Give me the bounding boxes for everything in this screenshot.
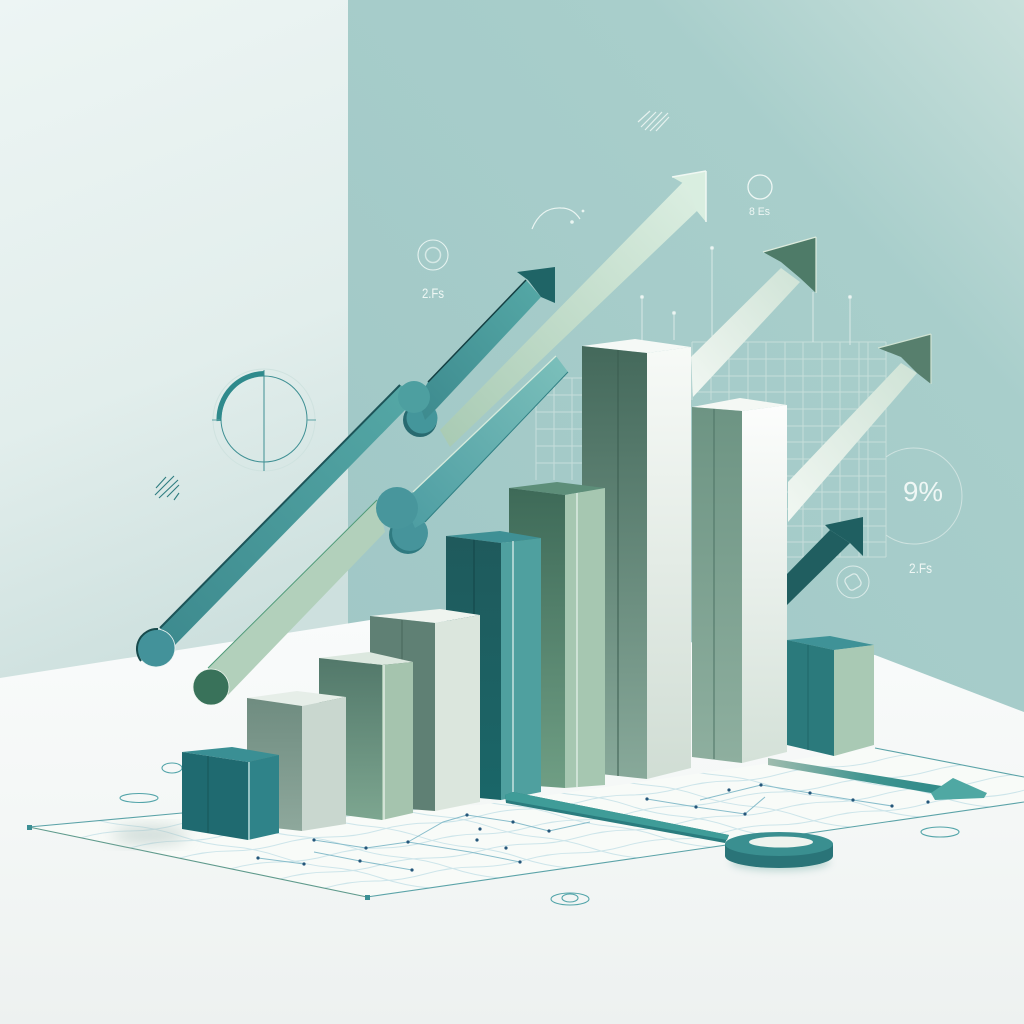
- icon: ring and label top right: 8 Es: [749, 206, 770, 218]
- icon: hatch top: [638, 111, 669, 131]
- arrow: lower teal: [389, 356, 568, 554]
- bar 4: [370, 609, 480, 811]
- arrow: dark teal small: [786, 517, 863, 605]
- icon: percent circle: [886, 448, 962, 576]
- chart: floor grid: [27, 748, 1024, 900]
- bar 7: [582, 339, 691, 779]
- icon: ring and label top right: [748, 175, 772, 218]
- shadow: under bars: [112, 827, 188, 843]
- bar 5: [446, 531, 541, 800]
- panel: right wall: [348, 0, 1024, 730]
- chart grid: pin lines: [640, 246, 852, 350]
- icon: target ring with label: 2.Fs: [422, 285, 444, 301]
- icon: percent circle: 9%: [903, 476, 943, 507]
- panel: left wall: [0, 0, 348, 700]
- arrow: floor arrow right: [768, 758, 987, 800]
- bar 3: [319, 652, 413, 820]
- icon: magnifier: [505, 792, 833, 871]
- icon: left dial: [212, 369, 316, 471]
- icon: small badge: [837, 566, 869, 598]
- icon: left hatch: [155, 476, 179, 500]
- arrow: light green long: [440, 171, 706, 447]
- bar 9: [787, 636, 874, 756]
- icon: percent circle: 2.Fs: [909, 560, 932, 576]
- bar 1: [182, 747, 279, 840]
- bar 2: [247, 691, 346, 831]
- arrow: pale middle: [691, 237, 816, 397]
- arrow: green long lower: [193, 487, 418, 705]
- arrow: long teal upper: [137, 267, 555, 667]
- bar 6: [509, 482, 605, 788]
- arrow: pale right: [788, 334, 931, 522]
- icon: floor ovals: [120, 763, 959, 905]
- icon: target ring with label: [418, 240, 448, 301]
- chart grid: wall grid: [536, 342, 886, 557]
- icon: gauge arc: [532, 208, 584, 229]
- bar 8: [692, 398, 787, 763]
- panel: floor: [0, 620, 1024, 1024]
